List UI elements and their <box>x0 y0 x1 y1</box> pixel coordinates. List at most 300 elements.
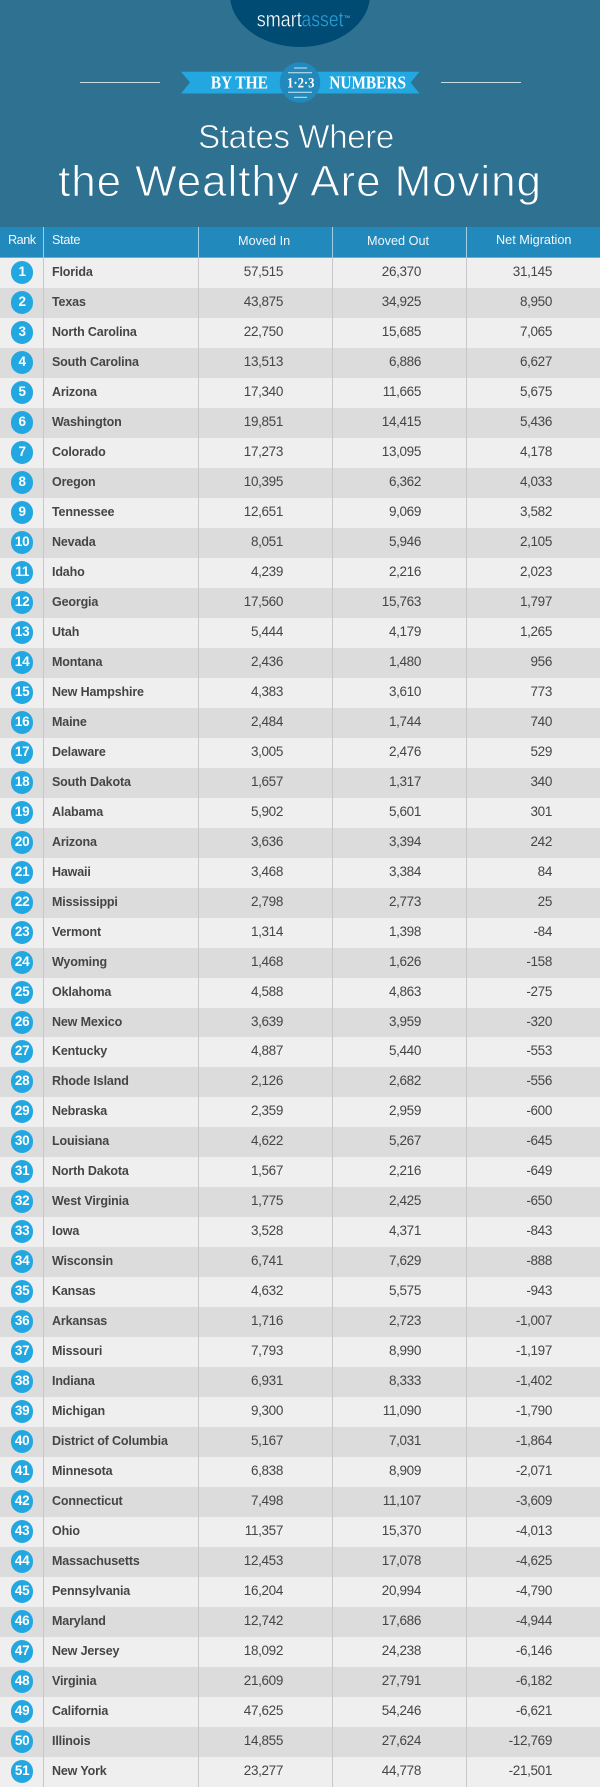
logo: smartasset oval: smart <box>257 9 302 32</box>
row: Tennessee <box>0 498 600 528</box>
row: Montana: Montana <box>52 655 102 669</box>
row: West Virginia: 32 <box>15 1193 30 1208</box>
row: Wisconsin: Wisconsin <box>52 1254 113 1268</box>
row: Kentucky: 27 <box>15 1043 30 1058</box>
row: District of Columbia: 5,167 <box>251 1433 283 1448</box>
row: Kansas <box>0 1277 600 1307</box>
row: Massachusetts: -4,625 <box>516 1553 552 1568</box>
row: Arizona: 17,340 <box>244 384 283 399</box>
row: California: 49 <box>15 1703 30 1718</box>
row: Wisconsin: 7,629 <box>389 1253 421 1268</box>
row: Wisconsin <box>0 1247 600 1277</box>
row: Nevada: 8,051 <box>251 534 283 549</box>
row: North Dakota: 1,567 <box>251 1163 283 1178</box>
logo: smartasset oval <box>230 0 370 47</box>
row: Virginia: -6,182 <box>516 1673 552 1688</box>
row: Utah: 13 <box>15 624 30 639</box>
row: Idaho: 4,239 <box>251 564 283 579</box>
row: Arkansas: 36 <box>15 1313 30 1328</box>
row: New Hampshire: New Hampshire <box>52 685 144 699</box>
row: Virginia: 48 <box>15 1673 30 1688</box>
row: Michigan: 9,300 <box>251 1403 283 1418</box>
row: Vermont: -84 <box>534 924 552 939</box>
row: West Virginia: -650 <box>526 1193 552 1208</box>
row: Virginia: 27,791 <box>382 1673 421 1688</box>
row: Oklahoma: 25 <box>15 984 30 999</box>
row: Montana: 2,436 <box>251 654 283 669</box>
row: Arizona: 11,665 <box>383 384 421 399</box>
row: Delaware: 17 <box>15 744 30 759</box>
row: California: 47,625 <box>244 1703 283 1718</box>
row: Florida: Florida <box>52 265 93 279</box>
row: New Hampshire: 773 <box>531 684 552 699</box>
row: Vermont <box>0 918 600 948</box>
table header row: Moved In <box>238 234 290 248</box>
row: Delaware: 2,476 <box>389 744 421 759</box>
row: Tennessee: 9 <box>19 504 26 519</box>
row: Ohio: 43 <box>15 1523 30 1538</box>
row: Montana: 1,480 <box>389 654 421 669</box>
row: Rhode Island: 2,682 <box>389 1073 421 1088</box>
table header row: Net Migration <box>496 233 571 247</box>
row: Arkansas: -1,007 <box>516 1313 552 1328</box>
row: Nebraska: 29 <box>15 1103 30 1118</box>
row: South Carolina: 4 <box>19 354 26 369</box>
row: Illinois: Illinois <box>52 1734 90 1748</box>
row: Nevada: 10 <box>15 534 30 549</box>
row: Maine: 2,484 <box>251 714 283 729</box>
ribbon: by the 1-2-3 numbers: BY THE <box>211 72 268 92</box>
row: Alabama: 301 <box>531 804 552 819</box>
row: Oklahoma <box>0 978 600 1008</box>
row: Kansas: Kansas <box>52 1284 96 1298</box>
row: Hawaii <box>0 858 600 888</box>
row: Vermont: 1,398 <box>389 924 421 939</box>
row: Florida: 57,515 <box>244 264 283 279</box>
row: Wisconsin: -888 <box>526 1253 552 1268</box>
row: North Dakota: 31 <box>15 1163 30 1178</box>
row: New Hampshire: 15 <box>15 684 30 699</box>
row: Delaware: 529 <box>531 744 552 759</box>
row: Arizona (20): 3,394 <box>389 834 421 849</box>
row: California: -6,621 <box>516 1703 552 1718</box>
row: Illinois: 27,624 <box>382 1733 421 1748</box>
row: Rhode Island: -556 <box>526 1073 552 1088</box>
row: Tennessee: Tennessee <box>52 505 114 519</box>
row: Delaware <box>0 738 600 768</box>
row: Georgia: 12 <box>15 594 30 609</box>
header banner <box>0 0 600 227</box>
row: West Virginia <box>0 1187 600 1217</box>
row: Michigan: 39 <box>15 1403 30 1418</box>
row: Montana: 14 <box>15 654 30 669</box>
row: Colorado: 13,095 <box>382 444 421 459</box>
row: Oklahoma: 4,588 <box>251 984 283 999</box>
row: South Dakota: 1,657 <box>251 774 283 789</box>
row: Illinois: 50 <box>15 1733 30 1748</box>
row: New Mexico: New Mexico <box>52 1015 122 1029</box>
row: District of Columbia: District of Columbia <box>52 1434 168 1448</box>
row: Connecticut: Connecticut <box>52 1494 123 1508</box>
row: New York: 44,778 <box>382 1763 421 1778</box>
row: Texas: 8,950 <box>520 294 552 309</box>
row: Idaho: Idaho <box>52 565 85 579</box>
row: New Mexico: -320 <box>526 1014 552 1029</box>
table header row: Moved Out <box>367 234 429 248</box>
row: Pennsylvania: 45 <box>15 1583 30 1598</box>
row: Arizona (20): 242 <box>531 834 552 849</box>
row: Maine <box>0 708 600 738</box>
row: Nevada: 2,105 <box>520 534 552 549</box>
row: Arizona: 5,675 <box>520 384 552 399</box>
row: Ohio: Ohio <box>52 1524 80 1538</box>
row: West Virginia: West Virginia <box>52 1194 129 1208</box>
row: Florida: 26,370 <box>382 264 421 279</box>
row: Indiana: -1,402 <box>516 1373 552 1388</box>
row: Mississippi: 2,773 <box>389 894 421 909</box>
row: Louisiana: -645 <box>526 1133 552 1148</box>
row: Alabama <box>0 798 600 828</box>
row: Indiana: 6,931 <box>251 1373 283 1388</box>
row: Alabama: Alabama <box>52 805 103 819</box>
row: Idaho: 2,216 <box>389 564 421 579</box>
row: Georgia: 1,797 <box>520 594 552 609</box>
row: Iowa: Iowa <box>52 1224 79 1238</box>
row: Iowa: 3,528 <box>251 1223 283 1238</box>
row: Rhode Island: 2,126 <box>251 1073 283 1088</box>
row: Arizona: 5 <box>19 384 26 399</box>
row: Alabama: 5,601 <box>389 804 421 819</box>
row: Kansas: 5,575 <box>389 1283 421 1298</box>
row: District of Columbia: 40 <box>15 1433 30 1448</box>
row: Vermont: 1,314 <box>251 924 283 939</box>
logo and by-the-numbers ribbon <box>80 0 521 103</box>
row: Utah: 4,179 <box>389 624 421 639</box>
row: Missouri: 37 <box>15 1343 30 1358</box>
row: New Mexico: 3,639 <box>251 1014 283 1029</box>
row: Washington: Washington <box>52 415 122 429</box>
row: Iowa: 33 <box>15 1223 30 1238</box>
row: California: 54,246 <box>382 1703 421 1718</box>
row: Wyoming: 1,468 <box>251 954 283 969</box>
row: North Dakota: -649 <box>526 1163 552 1178</box>
row: Kentucky: 4,887 <box>251 1043 283 1058</box>
row: New Hampshire: 3,610 <box>389 684 421 699</box>
row: Ohio <box>0 1517 600 1547</box>
row: South Carolina: 13,513 <box>244 354 283 369</box>
row: Georgia: 15,763 <box>382 594 421 609</box>
row: California: California <box>52 1704 108 1718</box>
row: Maryland: 12,742 <box>244 1613 283 1628</box>
row: South Dakota <box>0 768 600 798</box>
table header row: Rank <box>8 233 36 247</box>
row: Iowa: -843 <box>526 1223 552 1238</box>
row: Arkansas: 1,716 <box>251 1313 283 1328</box>
row: Massachusetts <box>0 1547 600 1577</box>
row: North Dakota <box>0 1157 600 1187</box>
row: Washington <box>0 408 600 438</box>
row: Mississippi: 2,798 <box>251 894 283 909</box>
row: Rhode Island <box>0 1067 600 1097</box>
row: Michigan: -1,790 <box>516 1403 552 1418</box>
row: Pennsylvania: 16,204 <box>244 1583 283 1598</box>
row: New Jersey: New Jersey <box>52 1644 119 1658</box>
row: Massachusetts: Massachusetts <box>52 1554 140 1568</box>
row: Florida <box>0 258 600 288</box>
title line 1: States Where <box>198 118 394 155</box>
row: Michigan: Michigan <box>52 1404 105 1418</box>
row: Ohio: 15,370 <box>382 1523 421 1538</box>
row: Maryland: -4,944 <box>516 1613 552 1628</box>
row: South Dakota: 340 <box>531 774 552 789</box>
row: Michigan: 11,090 <box>383 1403 421 1418</box>
row: Pennsylvania: -4,790 <box>516 1583 552 1598</box>
row: Idaho: 2,023 <box>520 564 552 579</box>
row: Tennessee: 3,582 <box>520 504 552 519</box>
row: New York: 23,277 <box>244 1763 283 1778</box>
row: Georgia: 17,560 <box>244 594 283 609</box>
row: Maryland: 46 <box>15 1613 30 1628</box>
row: Idaho <box>0 558 600 588</box>
row: Arizona <box>0 378 600 408</box>
row: New Jersey: 47 <box>15 1643 30 1658</box>
row: Mississippi: 22 <box>15 894 30 909</box>
row: Tennessee: 9,069 <box>389 504 421 519</box>
row: Missouri: 8,990 <box>389 1343 421 1358</box>
row: Oregon: Oregon <box>52 475 96 489</box>
row: Connecticut: -3,609 <box>516 1493 552 1508</box>
row: Connecticut: 7,498 <box>251 1493 283 1508</box>
row: Arkansas <box>0 1307 600 1337</box>
row: New Hampshire <box>0 678 600 708</box>
row: Indiana: 38 <box>15 1373 30 1388</box>
row: South Carolina <box>0 348 600 378</box>
row: Alabama: 5,902 <box>251 804 283 819</box>
row: New York <box>0 1757 600 1787</box>
row: Hawaii: Hawaii <box>52 865 91 879</box>
row: Arkansas: Arkansas <box>52 1314 107 1328</box>
row: Wyoming: Wyoming <box>52 955 107 969</box>
ribbon: by the 1-2-3 numbers: NUMBERS <box>329 72 406 92</box>
row: Florida: 1 <box>19 264 26 279</box>
row: Vermont: 23 <box>15 924 30 939</box>
row: Wisconsin: 6,741 <box>251 1253 283 1268</box>
row: Kentucky: 5,440 <box>389 1043 421 1058</box>
row: Florida: 31,145 <box>513 264 552 279</box>
row: Texas: 34,925 <box>382 294 421 309</box>
row: New Mexico <box>0 1008 600 1038</box>
row: Minnesota: 41 <box>15 1463 30 1478</box>
row: Minnesota: 6,838 <box>251 1463 283 1478</box>
row: Idaho: 11 <box>15 564 29 579</box>
row: Wyoming: 24 <box>15 954 30 969</box>
row: Illinois <box>0 1727 600 1757</box>
row: Kansas: -943 <box>526 1283 552 1298</box>
row: Minnesota: Minnesota <box>52 1464 112 1478</box>
row: Maryland: Maryland <box>52 1614 106 1628</box>
ribbon: by the 1-2-3 numbers: 1·2·3 <box>287 76 314 92</box>
row: North Dakota: North Dakota <box>52 1164 129 1178</box>
row: Nebraska: 2,959 <box>389 1103 421 1118</box>
row: District of Columbia <box>0 1427 600 1457</box>
row: Arizona: Arizona <box>52 385 97 399</box>
row: North Carolina: 22,750 <box>244 324 283 339</box>
row: Indiana: Indiana <box>52 1374 95 1388</box>
row: South Carolina: 6,886 <box>389 354 421 369</box>
title line 2: the Wealthy Are Moving <box>58 157 542 206</box>
row: Massachusetts: 44 <box>15 1553 30 1568</box>
row: Maine: Maine <box>52 715 87 729</box>
row: District of Columbia: -1,864 <box>516 1433 552 1448</box>
row: Kentucky: -553 <box>526 1043 552 1058</box>
row: Washington: 19,851 <box>244 414 283 429</box>
row: Kentucky: Kentucky <box>52 1044 107 1058</box>
row: Connecticut: 42 <box>15 1493 30 1508</box>
row: Oregon: 10,395 <box>244 474 283 489</box>
row: South Carolina: South Carolina <box>52 355 139 369</box>
row: Missouri: Missouri <box>52 1344 102 1358</box>
row: Nevada <box>0 528 600 558</box>
row: Louisiana: 30 <box>15 1133 30 1148</box>
row: Maryland <box>0 1607 600 1637</box>
row: Massachusetts: 12,453 <box>244 1553 283 1568</box>
row: Kentucky <box>0 1037 600 1067</box>
row: Vermont: Vermont <box>52 925 101 939</box>
row: California <box>0 1697 600 1727</box>
row: Virginia <box>0 1667 600 1697</box>
row: Texas: 2 <box>19 294 26 309</box>
row: Missouri <box>0 1337 600 1367</box>
row: Wisconsin: 34 <box>15 1253 30 1268</box>
row: Delaware: 3,005 <box>251 744 283 759</box>
row: Oregon <box>0 468 600 498</box>
row: Missouri: 7,793 <box>251 1343 283 1358</box>
row: Colorado: 7 <box>19 444 26 459</box>
row: Minnesota <box>0 1457 600 1487</box>
row: Kansas: 35 <box>15 1283 30 1298</box>
row: Arizona (20) <box>0 828 600 858</box>
row: Nevada: 5,946 <box>389 534 421 549</box>
table header row <box>0 227 600 258</box>
row: Alabama: 19 <box>15 804 30 819</box>
row: South Dakota: South Dakota <box>52 775 131 789</box>
row: Colorado <box>0 438 600 468</box>
row: Utah: Utah <box>52 625 79 639</box>
row: Georgia <box>0 588 600 618</box>
row: Illinois: -12,769 <box>509 1733 552 1748</box>
row: Arkansas: 2,723 <box>389 1313 421 1328</box>
logo: smartasset oval: TM <box>344 14 350 19</box>
row: New York: -21,501 <box>509 1763 552 1778</box>
row: Oregon: 6,362 <box>389 474 421 489</box>
row: Nebraska <box>0 1097 600 1127</box>
row: Louisiana: 4,622 <box>251 1133 283 1148</box>
row: Colorado: 17,273 <box>244 444 283 459</box>
row: New York: 51 <box>15 1763 30 1778</box>
row: West Virginia: 1,775 <box>251 1193 283 1208</box>
logo: smartasset oval: asset <box>302 9 344 32</box>
row: Illinois: 14,855 <box>244 1733 283 1748</box>
row: Michigan <box>0 1397 600 1427</box>
row: Minnesota: 8,909 <box>389 1463 421 1478</box>
row: Texas: Texas <box>52 295 86 309</box>
row: Louisiana <box>0 1127 600 1157</box>
ribbon: by the 1-2-3 numbers <box>181 62 420 103</box>
row: Mississippi: Mississippi <box>52 895 118 909</box>
row: Tennessee: 12,651 <box>244 504 283 519</box>
row: Ohio: 11,357 <box>245 1523 283 1538</box>
row: Pennsylvania <box>0 1577 600 1607</box>
row: Washington: 14,415 <box>382 414 421 429</box>
row: Montana <box>0 648 600 678</box>
row: South Dakota: 1,317 <box>389 774 421 789</box>
row: Nebraska: Nebraska <box>52 1104 107 1118</box>
row: Texas <box>0 288 600 318</box>
row: South Carolina: 6,627 <box>520 354 552 369</box>
row: Virginia: Virginia <box>52 1674 96 1688</box>
row: Colorado: 4,178 <box>520 444 552 459</box>
row: Oregon: 4,033 <box>520 474 552 489</box>
row: North Carolina: 15,685 <box>382 324 421 339</box>
row: Virginia: 21,609 <box>244 1673 283 1688</box>
row: New York: New York <box>52 1764 107 1778</box>
row: Wyoming: 1,626 <box>389 954 421 969</box>
row: Hawaii: 3,384 <box>389 864 421 879</box>
row: Hawaii: 84 <box>538 864 552 879</box>
row: West Virginia: 2,425 <box>389 1193 421 1208</box>
row: Nevada: Nevada <box>52 535 96 549</box>
row: Montana: 956 <box>531 654 552 669</box>
row: Utah: 5,444 <box>251 624 283 639</box>
row: Iowa <box>0 1217 600 1247</box>
row: Oregon: 8 <box>19 474 26 489</box>
row: New Jersey <box>0 1637 600 1667</box>
row: Utah <box>0 618 600 648</box>
row: Nebraska: 2,359 <box>251 1103 283 1118</box>
row: North Carolina: 7,065 <box>520 324 552 339</box>
row: Wyoming: -158 <box>526 954 552 969</box>
row: Oklahoma: 4,863 <box>389 984 421 999</box>
row: New Hampshire: 4,383 <box>251 684 283 699</box>
row: Connecticut <box>0 1487 600 1517</box>
row: Pennsylvania: 20,994 <box>382 1583 421 1598</box>
row: Utah: 1,265 <box>520 624 552 639</box>
row: North Dakota: 2,216 <box>389 1163 421 1178</box>
row: Washington: 5,436 <box>520 414 552 429</box>
row: Wyoming <box>0 948 600 978</box>
row: Pennsylvania: Pennsylvania <box>52 1584 130 1598</box>
row: District of Columbia: 7,031 <box>389 1433 421 1448</box>
row: New Jersey: 24,238 <box>382 1643 421 1658</box>
row: Rhode Island: 28 <box>15 1073 30 1088</box>
row: Maine: 16 <box>15 714 30 729</box>
row: Nebraska: -600 <box>526 1103 552 1118</box>
row: Maine: 1,744 <box>389 714 421 729</box>
row: Hawaii: 3,468 <box>251 864 283 879</box>
row: Maine: 740 <box>531 714 552 729</box>
row: Missouri: -1,197 <box>516 1343 552 1358</box>
row: North Carolina: North Carolina <box>52 325 137 339</box>
row: Oklahoma: -275 <box>526 984 552 999</box>
row: Massachusetts: 17,078 <box>382 1553 421 1568</box>
row: New Jersey: 18,092 <box>244 1643 283 1658</box>
row: Iowa: 4,371 <box>389 1223 421 1238</box>
row: Indiana <box>0 1367 600 1397</box>
row: Mississippi <box>0 888 600 918</box>
row: Ohio: -4,013 <box>516 1523 552 1538</box>
row: Texas: 43,875 <box>244 294 283 309</box>
row: Delaware: Delaware <box>52 745 106 759</box>
